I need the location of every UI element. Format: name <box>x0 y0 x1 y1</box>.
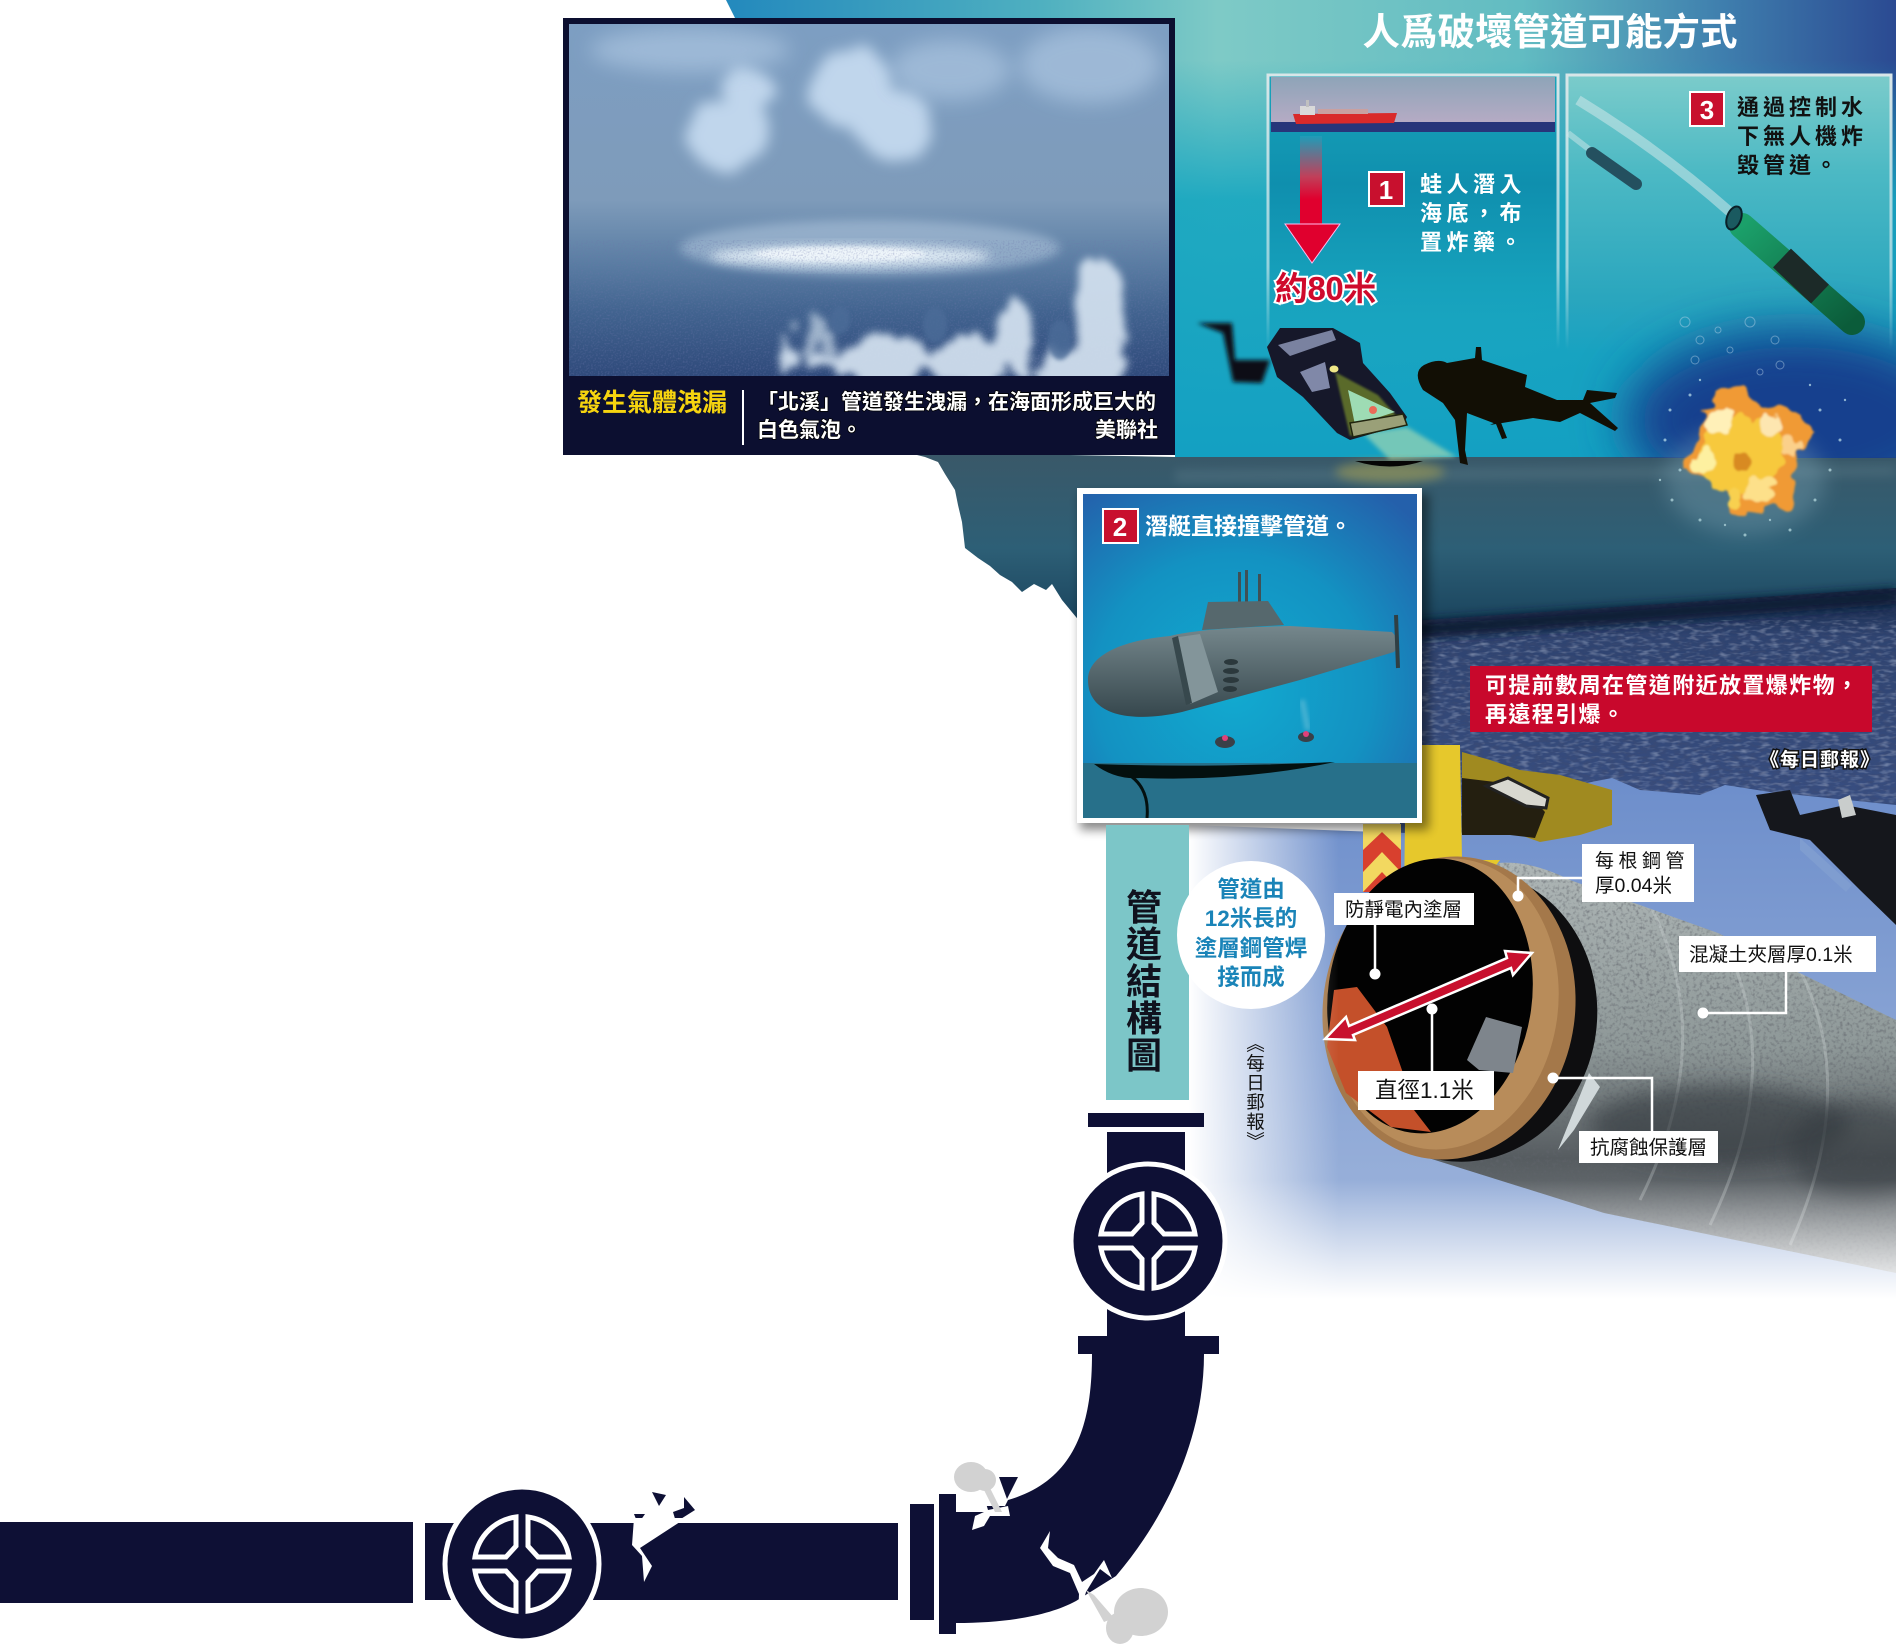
deep water glow <box>1625 330 1896 510</box>
credit: daily mail: 《每日郵報》 <box>1760 749 1880 771</box>
vertical label: pipe structure: 道 <box>1126 924 1162 965</box>
title: 人爲破壞管道可能方式 <box>1362 11 1738 53</box>
elbow <box>956 1354 1204 1623</box>
label: anti-static coating <box>1334 893 1474 925</box>
badge 3 <box>1690 92 1724 126</box>
label: concrete layer: 混凝土夾層厚0.1米 <box>1689 944 1853 966</box>
panel: photo of gas leak <box>563 18 1175 455</box>
badge 2 <box>1103 509 1138 543</box>
vertical label: pipe structure <box>1106 825 1189 1100</box>
top flange <box>1088 1113 1204 1127</box>
icon: mines <box>1215 700 1314 748</box>
icon: small drone <box>1592 153 1636 184</box>
credit: daily mail vertical: 《每日郵報》 <box>1244 1034 1266 1151</box>
background: lavender sky behind pipe <box>1189 778 1896 1320</box>
flange <box>1078 1336 1219 1354</box>
text: method 3 <box>1737 95 1867 178</box>
callout: 12m coated steel pipes <box>1177 861 1325 1009</box>
steel rim <box>1303 840 1595 1176</box>
label: diameter: 直徑1.1米 <box>1375 1078 1474 1103</box>
depth arrow <box>1285 136 1340 263</box>
callout: remote detonation <box>1470 666 1872 732</box>
label: anti-static coating: 防靜電內塗層 <box>1345 899 1462 921</box>
callout: 12m coated steel pipes: 塗層鋼管焊 <box>1195 935 1307 961</box>
text: method 3: 下無人機炸 <box>1737 124 1867 149</box>
depth label: 約80米 <box>1275 270 1376 307</box>
pipe interior <box>1310 845 1550 1147</box>
label: concrete layer <box>1679 936 1876 972</box>
icon: ship <box>1293 100 1397 124</box>
badge 2: 2 <box>1113 512 1127 542</box>
callout: 12m coated steel pipes: 接而成 <box>1217 965 1285 990</box>
vertical label: pipe structure: 構 <box>1126 998 1162 1039</box>
vertical label: pipe structure: 管 <box>1126 887 1162 928</box>
background: dark water texture <box>1400 582 1896 834</box>
caption text <box>757 390 1158 442</box>
badge 3: 3 <box>1700 95 1714 125</box>
panel 2: submarine <box>1077 488 1429 830</box>
callout: 12m coated steel pipes: 管道由 <box>1217 877 1285 902</box>
valve: upper <box>1071 1164 1225 1318</box>
broken shards <box>634 1477 1018 1524</box>
horizontal pipe left <box>0 1522 413 1603</box>
text: method 1: 蛙人潛入 <box>1420 172 1526 197</box>
background: seabed pipeline <box>905 452 1896 645</box>
callout: remote detonation: 再遠程引爆。 <box>1485 702 1625 727</box>
label: steel thickness <box>1582 844 1694 902</box>
caption text: 白色氣泡。 <box>757 419 862 442</box>
machinery: yellow crane <box>1363 745 1612 900</box>
caption text: 「北溪」管道發生洩漏，在海面形成巨大的 <box>757 390 1156 414</box>
panel 3: underwater drone <box>1566 74 1896 458</box>
caption text: 美聯社 <box>1095 419 1158 442</box>
label: steel thickness: 每根鋼管 <box>1595 850 1689 872</box>
caption heading: 發生氣體洩漏 <box>577 389 727 417</box>
badge 1 <box>1369 172 1404 206</box>
icon: submarine <box>1088 570 1398 717</box>
background: underwater scene <box>726 0 1896 645</box>
horizontal pipe right <box>590 1523 898 1600</box>
diameter arrow <box>1325 951 1532 1040</box>
gas plume: lower <box>1106 1588 1168 1644</box>
text: method 2: 潛艇直接撞擊管道。 <box>1145 513 1352 539</box>
badge 1: 1 <box>1379 175 1393 205</box>
text: method 1 <box>1420 172 1526 255</box>
icon: large drone <box>1723 204 1852 322</box>
elbow flanges <box>939 1494 956 1634</box>
vertical label: pipe structure: 結 <box>1126 961 1162 1002</box>
text: method 1: 海底，布 <box>1420 201 1526 226</box>
callout: 12m coated steel pipes: 12米長的 <box>1205 906 1297 931</box>
label: anti-corrosion layer <box>1579 1131 1718 1163</box>
steel pipe cross-section <box>1303 840 1896 1280</box>
wake <box>1578 100 1730 212</box>
text: method 3: 通過控制水 <box>1737 95 1867 120</box>
page fade to white <box>1189 780 1896 1348</box>
vertical pipe <box>1107 1132 1185 1336</box>
label: diameter <box>1358 1071 1494 1110</box>
machinery: right clamp arm <box>1756 790 1896 925</box>
pipe crack details <box>632 1488 1114 1622</box>
callout: remote detonation: 可提前數周在管道附近放置爆炸物， <box>1485 673 1859 698</box>
pipeline illustration <box>0 1113 1219 1634</box>
text: method 1: 置炸藥。 <box>1420 230 1526 255</box>
diver silhouette <box>1418 347 1618 465</box>
vertical label: pipe structure: 圖 <box>1126 1035 1162 1076</box>
black protective band <box>1314 853 1616 1179</box>
leader lines <box>1375 878 1786 1132</box>
label: anti-corrosion layer: 抗腐蝕保護層 <box>1590 1137 1707 1159</box>
valve: lower <box>445 1487 599 1641</box>
label: steel thickness: 厚0.04米 <box>1595 875 1672 897</box>
gas plume: upper <box>954 1462 996 1492</box>
concrete layer <box>1430 862 1896 1273</box>
text: method 3: 毀管道。 <box>1737 153 1841 178</box>
explosion <box>1659 317 1846 536</box>
photo <box>569 24 1169 387</box>
panel 1: frogmen <box>1268 74 1558 349</box>
diver with light <box>1197 323 1457 483</box>
